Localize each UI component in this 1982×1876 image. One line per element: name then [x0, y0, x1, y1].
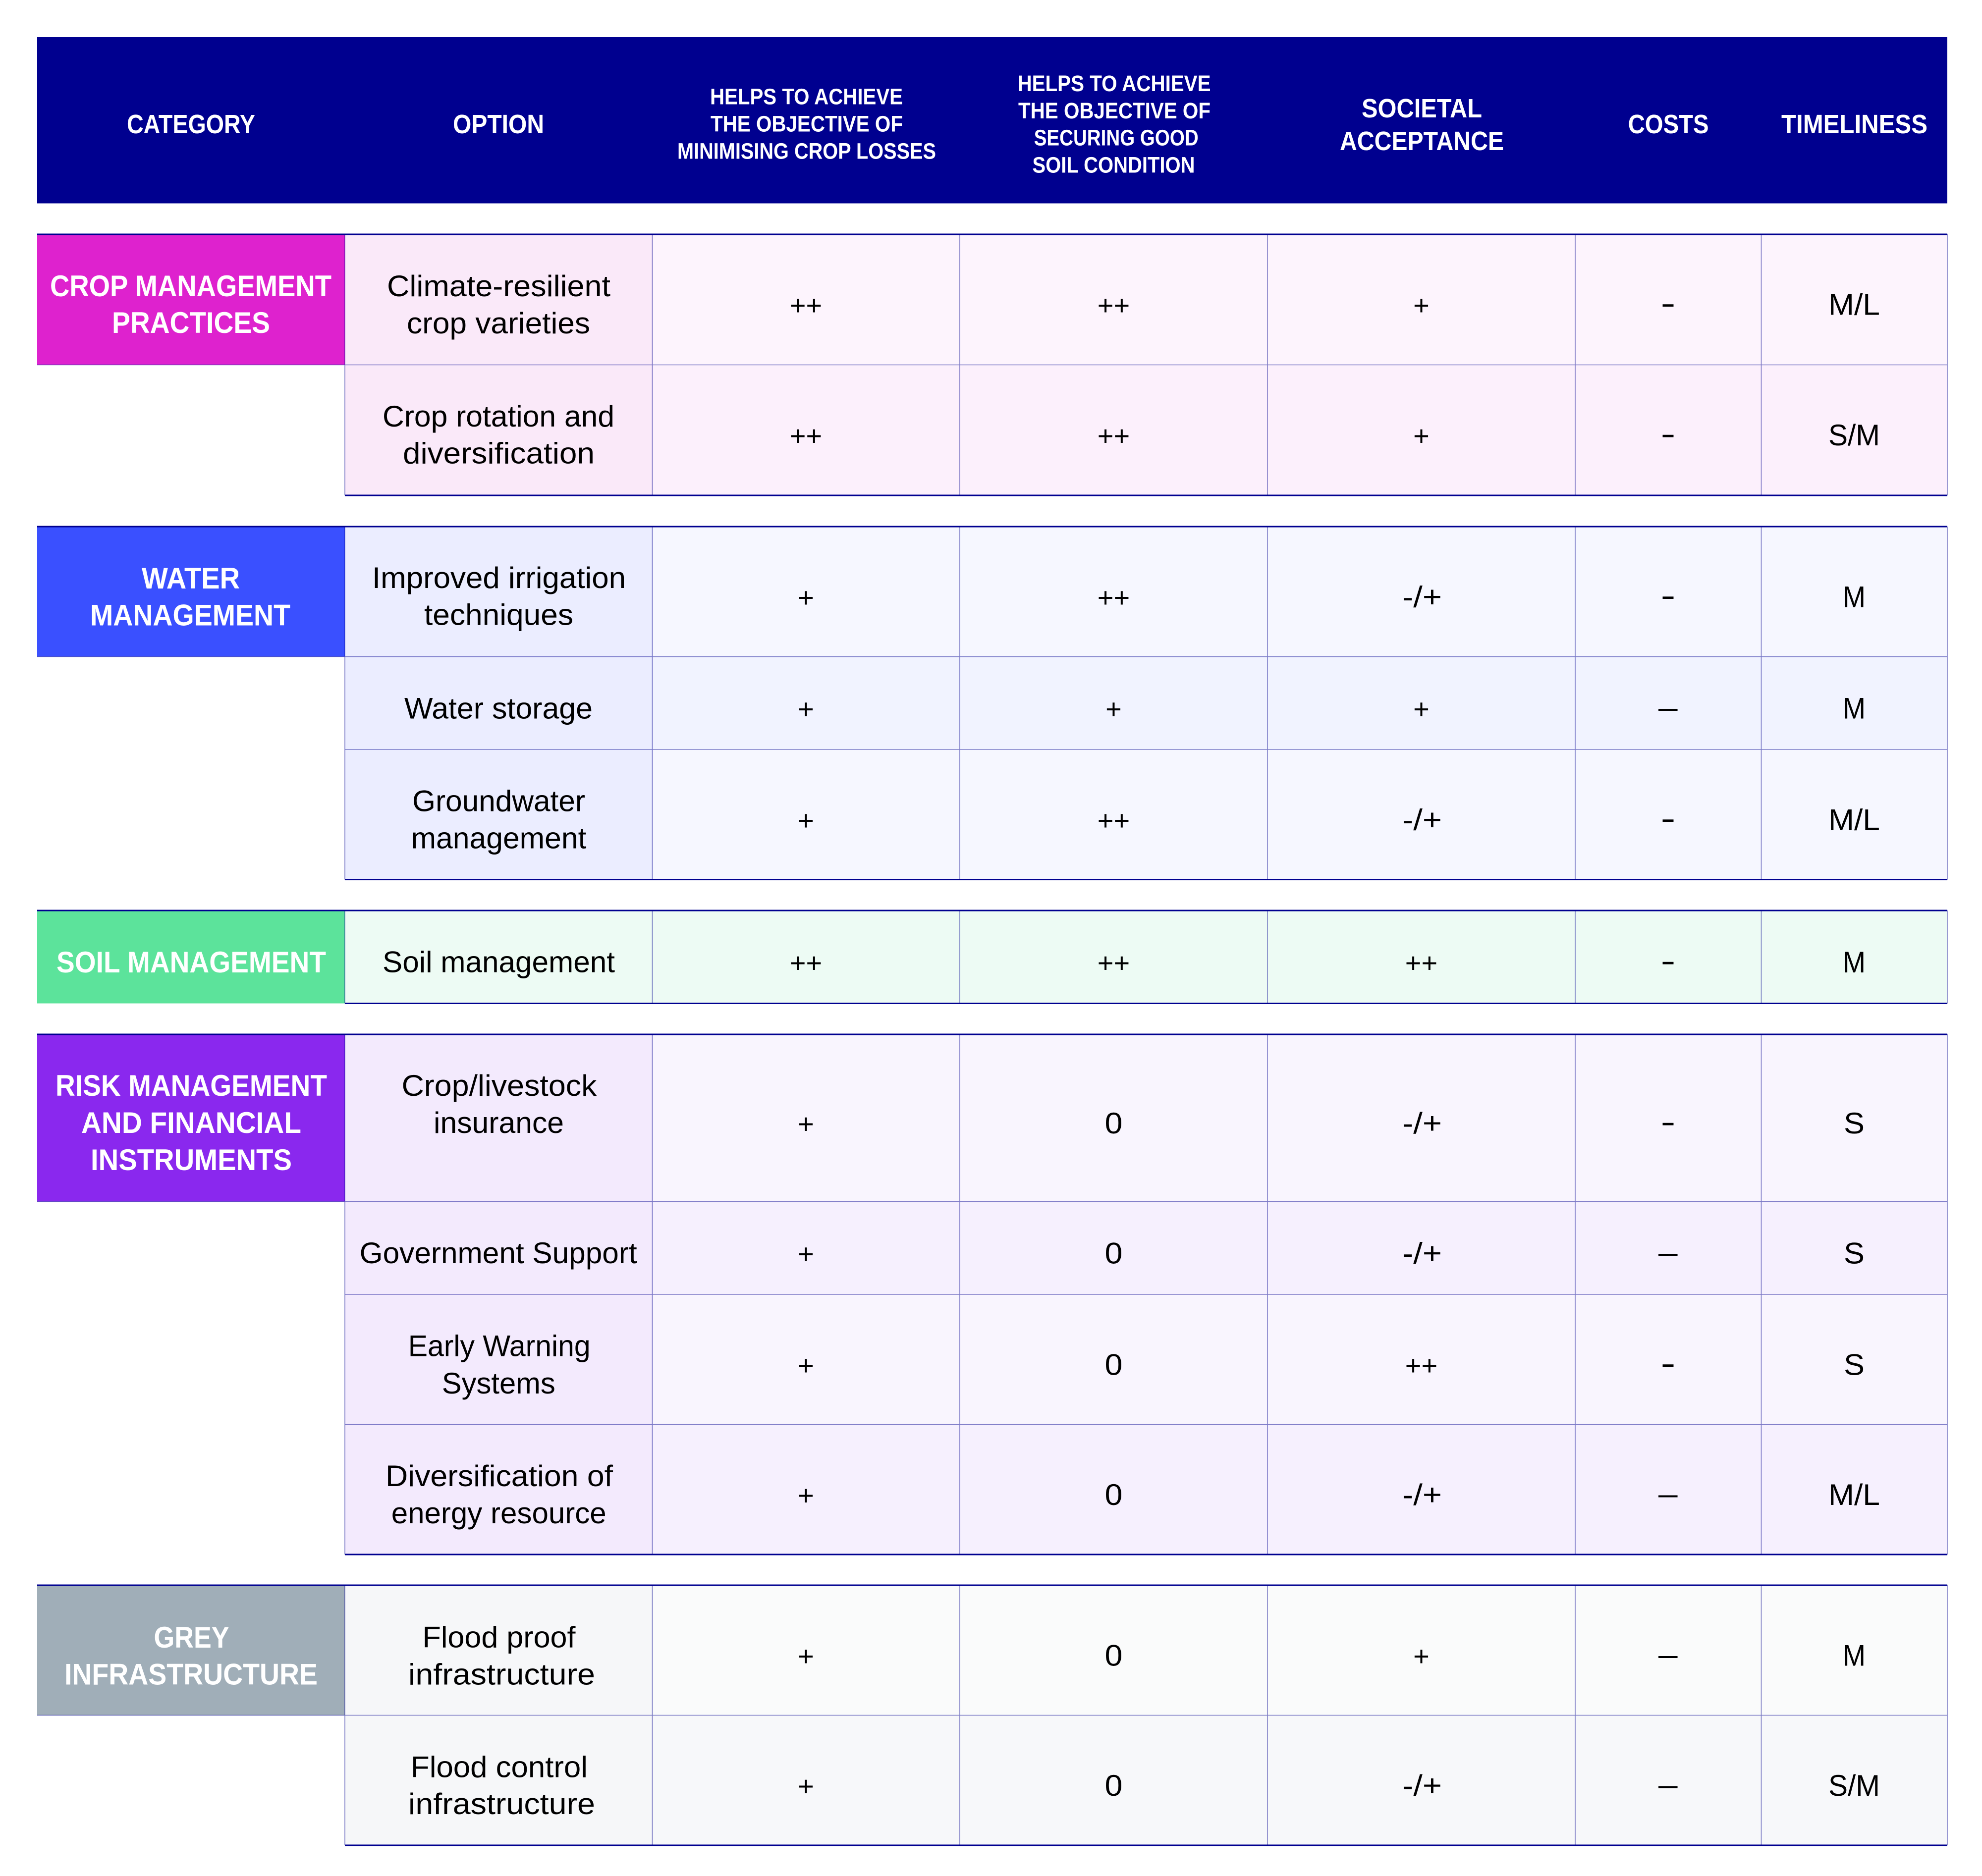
- row: flood control infrastructure: -/+: [1402, 1769, 1442, 1802]
- row: early warning systems: +: [798, 1349, 814, 1381]
- row: crop rotation and diversification: S/M: [1828, 419, 1880, 452]
- row: diversification of energy resource: M/L: [1828, 1478, 1880, 1511]
- row: flood proof infrastructure: +: [798, 1641, 814, 1671]
- row: improved irrigation techniques: ++: [1098, 582, 1130, 613]
- row: diversification of energy resource: 0: [1105, 1478, 1123, 1511]
- heading: securing good soil condition: [1018, 71, 1211, 178]
- row: flood proof infrastructure: M: [1843, 1639, 1866, 1672]
- row: crop rotation and diversification: ++: [1098, 420, 1130, 451]
- row: climate-resilient crop varieties: M/L: [1828, 288, 1880, 322]
- category tile: risk management and financial instruments: [37, 1034, 345, 1202]
- row: crop rotation and diversification: [383, 400, 1880, 470]
- row: soil management: Soil management: [383, 945, 615, 979]
- row: groundwater management: [411, 785, 1880, 855]
- category tile: water management: WATER: [142, 562, 240, 595]
- category tile: soil management: SOIL MANAGEMENT: [56, 946, 326, 979]
- row: groundwater management: -/+: [1402, 804, 1442, 836]
- category tile: grey infrastructure: [37, 1585, 345, 1715]
- row: groundwater management: M/L: [1828, 804, 1880, 836]
- row: government support: –: [1658, 1235, 1678, 1269]
- row: water storage: M: [1843, 692, 1866, 725]
- heading: securing good soil condition: SOIL CONDITION: [1033, 153, 1195, 178]
- row: water storage: +: [798, 694, 814, 724]
- heading: costs: COSTS: [1628, 110, 1709, 139]
- category tile: water management: MANAGEMENT: [90, 598, 290, 632]
- category tile: risk management and financial instruments: AND FINANCIAL: [81, 1106, 301, 1139]
- panel: crop management practices: [37, 234, 1947, 495]
- row: soil management: M: [1843, 946, 1866, 979]
- row: government support: -/+: [1402, 1236, 1442, 1270]
- row: flood proof infrastructure: Flood proof: [422, 1621, 576, 1654]
- row: soil management: ++: [790, 947, 822, 978]
- row: government support: +: [798, 1238, 814, 1269]
- row: improved irrigation techniques: +: [798, 582, 814, 613]
- row: government support: Government Support: [360, 1236, 637, 1270]
- row: crop/livestock insurance: [401, 1069, 1865, 1140]
- row: flood control infrastructure: [408, 1751, 1880, 1821]
- row: government support: 0: [1105, 1236, 1123, 1270]
- table header row: [37, 37, 1947, 203]
- row: early warning systems: Systems: [442, 1367, 555, 1400]
- row: improved irrigation techniques: Improved irrigation: [372, 561, 626, 594]
- heading: minimising crop losses: MINIMISING CROP LOSSES: [677, 139, 936, 164]
- row: diversification of energy resource: Diversification of: [385, 1459, 613, 1493]
- row: improved irrigation techniques: [372, 561, 1866, 632]
- row: improved irrigation techniques: techniques: [424, 598, 573, 632]
- row: climate-resilient crop varieties: ++: [790, 290, 822, 321]
- row: flood control infrastructure: Flood control: [411, 1751, 588, 1784]
- row: soil management: ++: [1405, 947, 1437, 978]
- category tile: crop management practices: [37, 234, 345, 365]
- row: flood proof infrastructure: [408, 1621, 1866, 1691]
- row: flood control infrastructure: S/M: [1828, 1769, 1880, 1802]
- row: crop rotation and diversification: diversification: [403, 437, 595, 470]
- heading: securing good soil condition: HELPS TO ACHIEVE: [1018, 71, 1211, 96]
- category tile: grey infrastructure: INFRASTRUCTURE: [64, 1658, 318, 1691]
- row: diversification of energy resource: +: [798, 1480, 814, 1511]
- category tile: risk management and financial instruments: INSTRUMENTS: [91, 1143, 292, 1177]
- row: flood control infrastructure: –: [1658, 1768, 1678, 1801]
- heading: minimising crop losses: HELPS TO ACHIEVE: [710, 84, 903, 109]
- row: improved irrigation techniques: -/+: [1402, 581, 1442, 613]
- heading: securing good soil condition: THE OBJECTIVE OF: [1018, 98, 1211, 123]
- row: diversification of energy resource: –: [1658, 1477, 1678, 1510]
- row: early warning systems: S: [1844, 1348, 1865, 1381]
- panel: grey infrastructure: [37, 1585, 1947, 1845]
- row: early warning systems: ++: [1405, 1349, 1437, 1381]
- heading: timeliness: TIMELINESS: [1781, 110, 1927, 139]
- row: diversification of energy resource: -/+: [1402, 1478, 1442, 1511]
- row: government support: [360, 1235, 1865, 1270]
- row: groundwater management: management: [411, 821, 587, 855]
- row: crop rotation and diversification: Crop rotation and: [383, 400, 614, 433]
- row: water storage: +: [1105, 694, 1122, 724]
- row: crop rotation and diversification: -: [1661, 417, 1676, 450]
- row: water storage: +: [1413, 694, 1430, 724]
- row: groundwater management: -: [1661, 802, 1676, 835]
- heading: societal acceptance: ACCEPTANCE: [1340, 127, 1504, 156]
- row: water storage: Water storage: [404, 692, 593, 725]
- heading: societal acceptance: SOCIETAL: [1362, 94, 1482, 123]
- row: crop rotation and diversification: +: [1413, 420, 1430, 451]
- row: climate-resilient crop varieties: -: [1661, 287, 1676, 320]
- row: flood control infrastructure: +: [798, 1770, 814, 1802]
- row: climate-resilient crop varieties: crop varieties: [407, 307, 590, 340]
- heading: minimising crop losses: [677, 84, 936, 164]
- heading: minimising crop losses: THE OBJECTIVE OF: [711, 111, 903, 137]
- row: climate-resilient crop varieties: [387, 269, 1880, 340]
- category tile: risk management and financial instruments: RISK MANAGEMENT: [55, 1069, 327, 1102]
- row: flood proof infrastructure: –: [1658, 1638, 1678, 1671]
- row: soil management: ++: [1098, 947, 1130, 978]
- heading: category: CATEGORY: [127, 110, 255, 139]
- row: early warning systems: -: [1661, 1346, 1676, 1380]
- panel: soil management: [37, 911, 1947, 1004]
- row: early warning systems: [408, 1329, 1865, 1400]
- row: crop/livestock insurance: 0: [1105, 1107, 1123, 1140]
- row: diversification of energy resource: [385, 1459, 1880, 1530]
- row: groundwater management: +: [798, 804, 814, 836]
- row: flood proof infrastructure: +: [1413, 1641, 1430, 1671]
- row: crop/livestock insurance: +: [798, 1108, 814, 1139]
- row: early warning systems: Early Warning: [408, 1329, 591, 1362]
- row: flood proof infrastructure: 0: [1105, 1639, 1123, 1672]
- row: crop/livestock insurance: S: [1844, 1107, 1865, 1140]
- row: flood control infrastructure: 0: [1105, 1769, 1123, 1802]
- panel: water management: [37, 527, 1947, 880]
- row: water storage: –: [1658, 691, 1678, 724]
- row: crop/livestock insurance: insurance: [434, 1106, 564, 1139]
- category tile: crop management practices: CROP MANAGEMENT: [50, 269, 331, 303]
- row: climate-resilient crop varieties: +: [1413, 290, 1430, 321]
- heading: societal acceptance: [1340, 94, 1504, 156]
- row: climate-resilient crop varieties: Climate-resilient: [387, 269, 610, 303]
- category tile: crop management practices: PRACTICES: [112, 306, 270, 339]
- row: flood control infrastructure: infrastructure: [408, 1787, 595, 1821]
- row: crop/livestock insurance: Crop/livestock: [401, 1069, 598, 1102]
- row: flood proof infrastructure: infrastructure: [408, 1658, 595, 1691]
- row: groundwater management: ++: [1098, 804, 1130, 836]
- category tile: grey infrastructure: GREY: [154, 1621, 229, 1654]
- row: soil management: -: [1661, 944, 1676, 977]
- row: improved irrigation techniques: -: [1661, 579, 1676, 612]
- row: water storage: [404, 691, 1866, 725]
- row: soil management: [383, 944, 1866, 979]
- row: crop/livestock insurance: -: [1661, 1105, 1676, 1138]
- row: early warning systems: 0: [1105, 1348, 1123, 1381]
- row: crop rotation and diversification: ++: [790, 420, 822, 451]
- heading: securing good soil condition: SECURING GOOD: [1034, 125, 1199, 151]
- row: crop/livestock insurance: -/+: [1402, 1107, 1442, 1140]
- row: climate-resilient crop varieties: ++: [1098, 290, 1130, 321]
- heading: option: OPTION: [453, 110, 544, 139]
- category tile: soil management: [37, 911, 345, 1004]
- row: government support: S: [1844, 1236, 1865, 1270]
- category tile: water management: [37, 527, 345, 657]
- row: groundwater management: Groundwater: [412, 785, 585, 818]
- row: diversification of energy resource: energy resource: [391, 1497, 606, 1530]
- panel: risk management and financial instruments: [37, 1034, 1947, 1554]
- row: improved irrigation techniques: M: [1843, 581, 1866, 613]
